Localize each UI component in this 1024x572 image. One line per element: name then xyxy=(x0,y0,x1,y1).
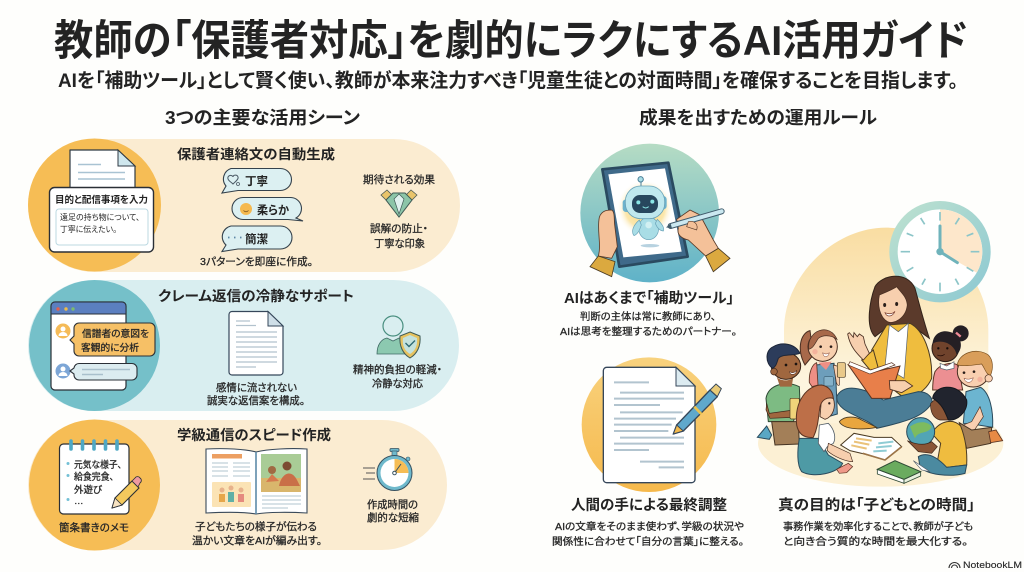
rule 1 text: 判断の主体は常に教師にあり、 xyxy=(580,310,716,323)
effect label: 期待される効果 xyxy=(363,173,435,186)
speech bubble: concise: 簡潔 xyxy=(245,232,268,246)
rule 1: AI as assist tool: AIは思考を整理するためのパートナー。 xyxy=(560,325,737,338)
rule 2 text: AIの文章をそのまま使わず、学級の状況や xyxy=(555,520,744,533)
rule 3: time with children: と向き合う質的な時間を最大化する。 xyxy=(783,535,968,548)
time saving text: 作成時間の xyxy=(367,499,418,511)
subtitle: AIを「補助ツール」として賢く使い、教師が本来注力すべき「児童生徒との対面時間」を確保することを目指します。 xyxy=(58,69,958,92)
illustration: document with pen xyxy=(582,357,721,492)
rule 3 text: 事務作業を効率化することで、教師が子ども xyxy=(783,520,973,533)
icon: memo pad: 給食完食、 xyxy=(74,471,114,483)
teacher xyxy=(837,276,932,429)
title: 教師の「保護者対応」を劇的にラクにするAI活用ガイド xyxy=(54,17,968,64)
illustration: tablet with robot xyxy=(580,144,730,282)
panel: complaint reply support: 誠実な返信案を構成。 xyxy=(207,394,305,407)
speech bubble: gentle xyxy=(232,198,303,221)
memo text: 元気な様子、 xyxy=(74,459,122,471)
icon: gem with ribbon xyxy=(381,190,417,217)
child: boy in green xyxy=(757,344,801,445)
rule 2: human final adjustment xyxy=(552,357,744,548)
speech bubble: polite xyxy=(222,168,292,193)
panel heading: 学級通信のスピード作成 xyxy=(177,427,331,443)
child: boy with globe xyxy=(907,387,967,475)
icon: memo pad: 外遊び xyxy=(74,484,103,496)
rule 1: AI as assist tool xyxy=(560,144,737,338)
icon: memo pad: … xyxy=(74,496,84,507)
icon: document and input card xyxy=(50,150,154,252)
panel heading: クレーム返信の冷静なサポート xyxy=(158,288,354,304)
icon: document and input card: 丁寧に伝えたい。 xyxy=(60,224,117,234)
callout text: 信譜者の意図を xyxy=(82,328,149,340)
icon: person with shield xyxy=(377,316,420,358)
icon: chat window xyxy=(51,302,155,390)
icon: document xyxy=(229,312,283,375)
panel: class newsletter: 温かい文章をAIが編み出す。 xyxy=(192,534,322,547)
panel: parent letter generation xyxy=(28,138,460,272)
child: girl with ponytail xyxy=(800,330,845,417)
memo caption: 箇条書きのメモ xyxy=(59,521,129,534)
icon: pencil xyxy=(112,477,141,508)
reply text: 感情に流されない xyxy=(216,381,297,394)
panel: complaint reply support: 冷静な対応 xyxy=(372,377,423,390)
heading: left section: 3つの主要な活用シーン xyxy=(165,108,360,128)
caption: 3パターンを即座に作成。 xyxy=(200,256,313,268)
newsletter text: 子どもたちの様子が伝わる xyxy=(195,520,317,533)
icon: open newsletter xyxy=(206,449,307,514)
panel: class newsletter: 劇的な短縮 xyxy=(367,511,419,524)
rule 1 heading: AIはあくまで「補助ツール」 xyxy=(564,289,734,307)
icon: stopwatch xyxy=(363,448,412,490)
icon: memo pad xyxy=(60,441,141,514)
open book on floor xyxy=(841,433,902,460)
logo: NotebookLM: NotebookLM xyxy=(963,560,1022,570)
card title: 目的と配信事項を入力 xyxy=(55,194,148,206)
panel: parent letter generation: 丁寧な印象 xyxy=(374,237,425,250)
panel: class newsletter xyxy=(28,420,447,550)
icon: chat window: 客観的に分析 xyxy=(81,342,140,354)
child: girl with bun xyxy=(932,325,969,390)
panel: complaint reply support xyxy=(28,280,459,411)
green book xyxy=(877,461,921,483)
child: girl from behind xyxy=(796,385,853,475)
illustration: teacher with children and clock xyxy=(757,201,1003,487)
logo: NotebookLM xyxy=(949,560,1022,570)
benefit text: 精神的負担の軽減・ xyxy=(353,363,442,376)
child: blond boy xyxy=(957,351,1003,448)
rule 2 heading: 人間の手による最終調整 xyxy=(571,496,727,514)
speech bubble: concise xyxy=(222,226,292,252)
clock xyxy=(889,201,991,302)
effect text: 誤解の防止・ xyxy=(370,222,428,235)
speech bubble: gentle: 柔らか xyxy=(257,203,290,217)
card text: 遠足の持ち物について、 xyxy=(60,212,140,222)
heading: right section: 成果を出すための運用ルール xyxy=(639,107,877,128)
rule 3: time with children xyxy=(757,201,1003,548)
panel heading: 保護者連絡文の自動生成 xyxy=(177,146,336,162)
rule 3 heading: 真の目的は「子どもとの時間」 xyxy=(778,496,975,514)
rule 2: human final adjustment: 関係性に合わせて「自分の言葉」に整える。 xyxy=(552,535,744,548)
speech bubble: polite: 丁寧 xyxy=(245,174,268,188)
